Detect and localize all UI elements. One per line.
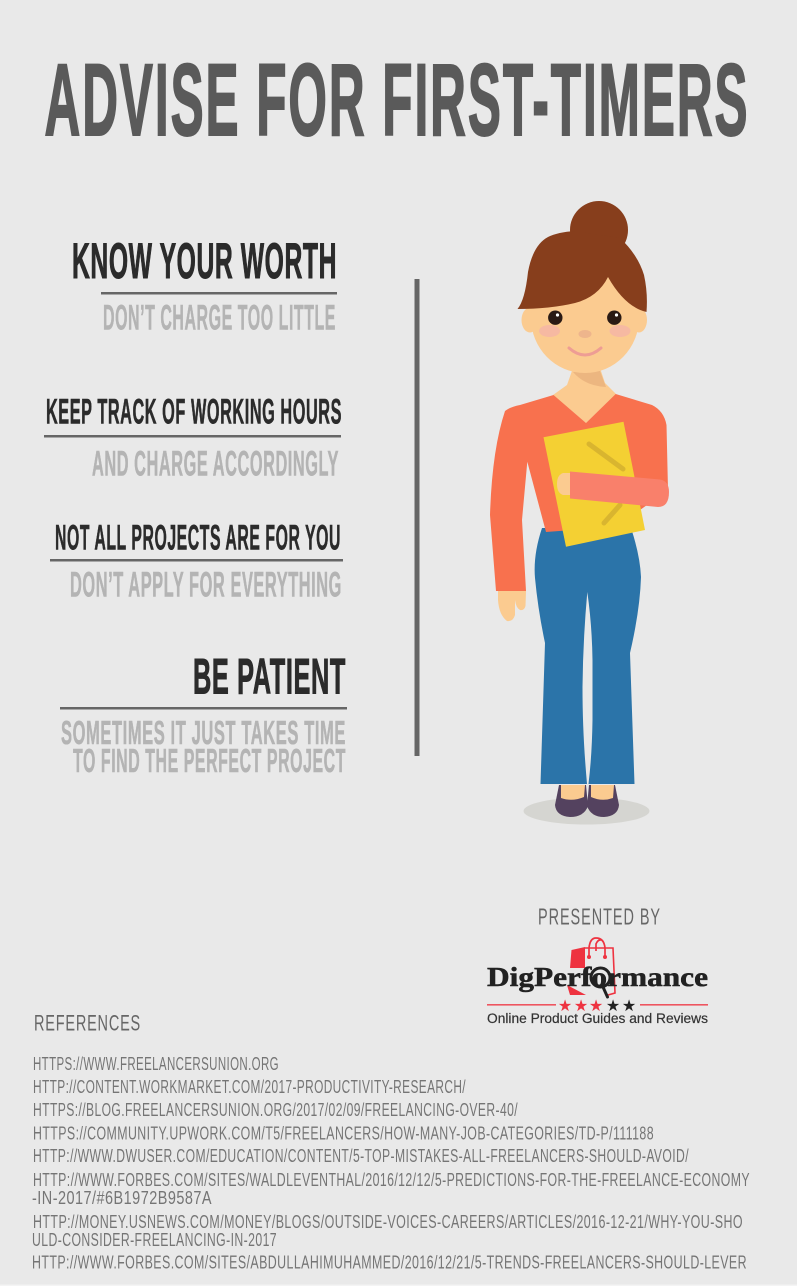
advice 3 [50,518,343,604]
references list [32,1054,750,1272]
right hand [557,473,571,495]
logo tagline: Online Product Guides and Reviews [487,1011,708,1026]
panel: advice list [44,233,347,780]
presented by: PRESENTED BY [538,904,661,930]
references list: HTTPS://BLOG.FREELANCERSUNION.ORG/2017/02/09/FREELANCING-OVER-40/ [33,1100,518,1120]
advice 1 [72,233,337,338]
vertical divider [414,279,420,756]
references list: ULD-CONSIDER-FREELANCING-IN-2017 [32,1230,277,1250]
rating stars: ★ [558,996,572,1015]
references list: HTTPS://WWW.FREELANCERSUNION.ORG [33,1054,279,1074]
left hand [498,591,526,621]
cheeks [539,325,630,337]
advice 2 [44,392,342,484]
text: AND CHARGE ACCORDINGLY [92,444,339,484]
advice 4 [60,648,347,780]
rating stars: ★ [606,996,620,1015]
nose [578,330,592,338]
text: NOT ALL PROJECTS ARE FOR YOU [55,518,341,558]
shadow [524,798,650,824]
references list: -IN-2017/#6B1972B9587A [32,1188,212,1208]
text: KEEP TRACK OF WORKING HOURS [46,392,342,432]
logo rule [487,1004,708,1006]
panel: advice list: KNOW YOUR WORTH [72,233,337,289]
icon: shopping bag [567,938,615,995]
rating stars: ★ [589,996,603,1015]
logo wordmark: DigPerformance [487,962,708,992]
rating stars: ★ [574,996,588,1015]
shirt [490,394,668,591]
shoes [555,785,619,817]
neck [553,368,616,423]
references heading: REFERENCES [34,1010,141,1036]
rating stars: ★ [622,996,636,1015]
face [531,263,639,373]
ears [522,308,538,332]
neck shadow [573,371,606,387]
eyes [548,310,622,325]
references list: HTTP://CONTENT.WORKMARKET.COM/2017-PRODUCTIVITY-RESEARCH/ [33,1077,466,1097]
text: DON’T CHARGE TOO LITTLE [103,298,336,338]
text: SOMETIMES IT JUST TAKES TIME [61,715,346,752]
folder [544,422,645,547]
text: TO FIND THE PERFECT PROJECT [73,743,346,780]
hair [518,201,647,312]
illustration: woman holding folder [490,201,669,824]
icon: magnifier [591,968,610,997]
logo: DigPerformance [487,938,708,1026]
trousers [535,528,641,784]
rating stars [558,996,636,1015]
forearm [570,472,669,507]
text: DON’T APPLY FOR EVERYTHING [70,566,342,604]
advice 4: BE PATIENT [193,648,346,704]
smile [569,348,601,355]
